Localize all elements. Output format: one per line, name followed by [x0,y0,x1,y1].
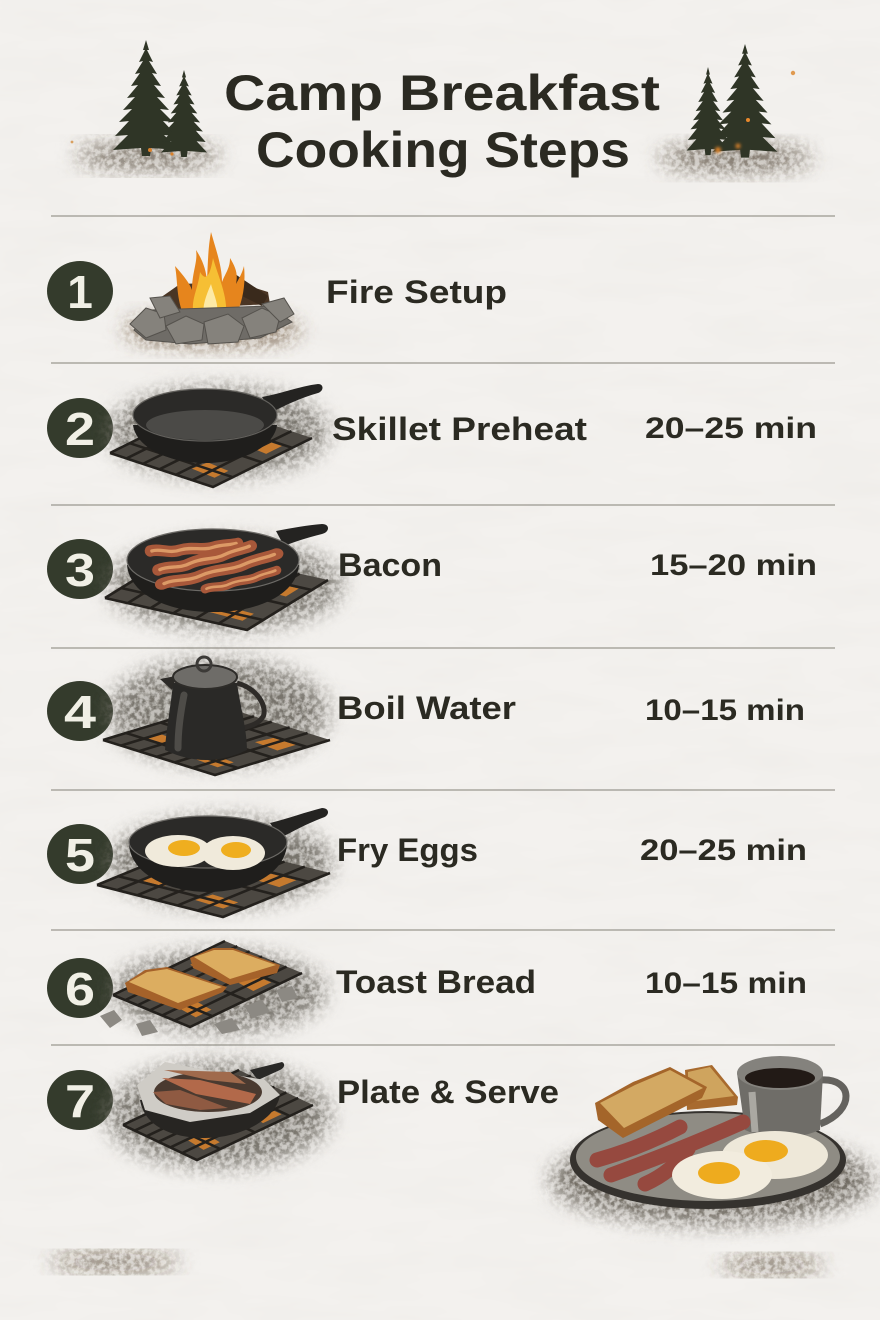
time: 15-20 min: 15–20 min [650,549,817,582]
decoration: bottom left ash [50,1256,180,1268]
icon: left pine trees [71,40,220,166]
badge 6: 6 [65,963,95,1015]
label: Fire Setup: Fire Setup [326,274,507,310]
badge 6 [47,958,113,1018]
rocks [100,986,298,1036]
step 5: fry eggs [47,808,807,917]
time: 10-15 min: 10–15 min [645,694,805,727]
title: Cooking Steps [256,122,630,178]
title: Camp Breakfast [224,65,660,121]
label: Boil Water: Boil Water [337,690,516,726]
badge 2 [47,398,113,458]
label: Bacon: Bacon [338,547,442,583]
time: 10-15 min: 10–15 min [645,967,807,1000]
decoration: bottom right ash [720,1259,824,1271]
step 3: bacon [47,524,817,630]
icon: kettle on grate [103,657,330,775]
icon: bacon in foil on grate [108,1062,328,1165]
badge 5: 5 [65,829,95,881]
dividers [51,216,835,1045]
icon: bacon in skillet [105,524,340,630]
badge 2: 2 [65,403,95,455]
time: 20-25 min: 20–25 min [640,834,807,867]
label: Toast Bread: Toast Bread [336,964,536,1000]
badge 4 [47,681,113,741]
step 6: toast bread [47,941,807,1036]
bacon [597,1122,743,1184]
icon: toast on grate [100,941,323,1036]
stones [130,296,294,344]
mug [737,1056,846,1138]
step 7: plate and serve [47,1056,872,1222]
label: Plate & Serve: Plate & Serve [337,1074,559,1110]
icon: breakfast plate with coffee [552,1056,872,1222]
badge 3 [47,539,113,599]
plate [570,1111,846,1209]
icon: skillet on grate [110,384,326,487]
icon: campfire [124,232,300,344]
badge 1 [47,261,113,321]
title [224,65,660,178]
badge 1: 1 [67,266,93,318]
toast [595,1065,738,1138]
badge 7: 7 [65,1075,95,1127]
step 2: skillet preheat [47,384,817,487]
badge 4: 4 [64,686,97,738]
icon: eggs in skillet [97,808,330,917]
label: Skillet Preheat: Skillet Preheat [332,411,587,447]
icon: right pine trees [659,44,811,169]
badge 7 [47,1070,113,1130]
step 4: boil water [47,657,805,775]
label: Fry Eggs: Fry Eggs [337,832,478,868]
eggs [672,1131,828,1199]
badge 3: 3 [65,544,95,596]
badge 5 [47,824,113,884]
step 1: fire setup [47,232,507,344]
time: 20-25 min: 20–25 min [645,412,817,445]
